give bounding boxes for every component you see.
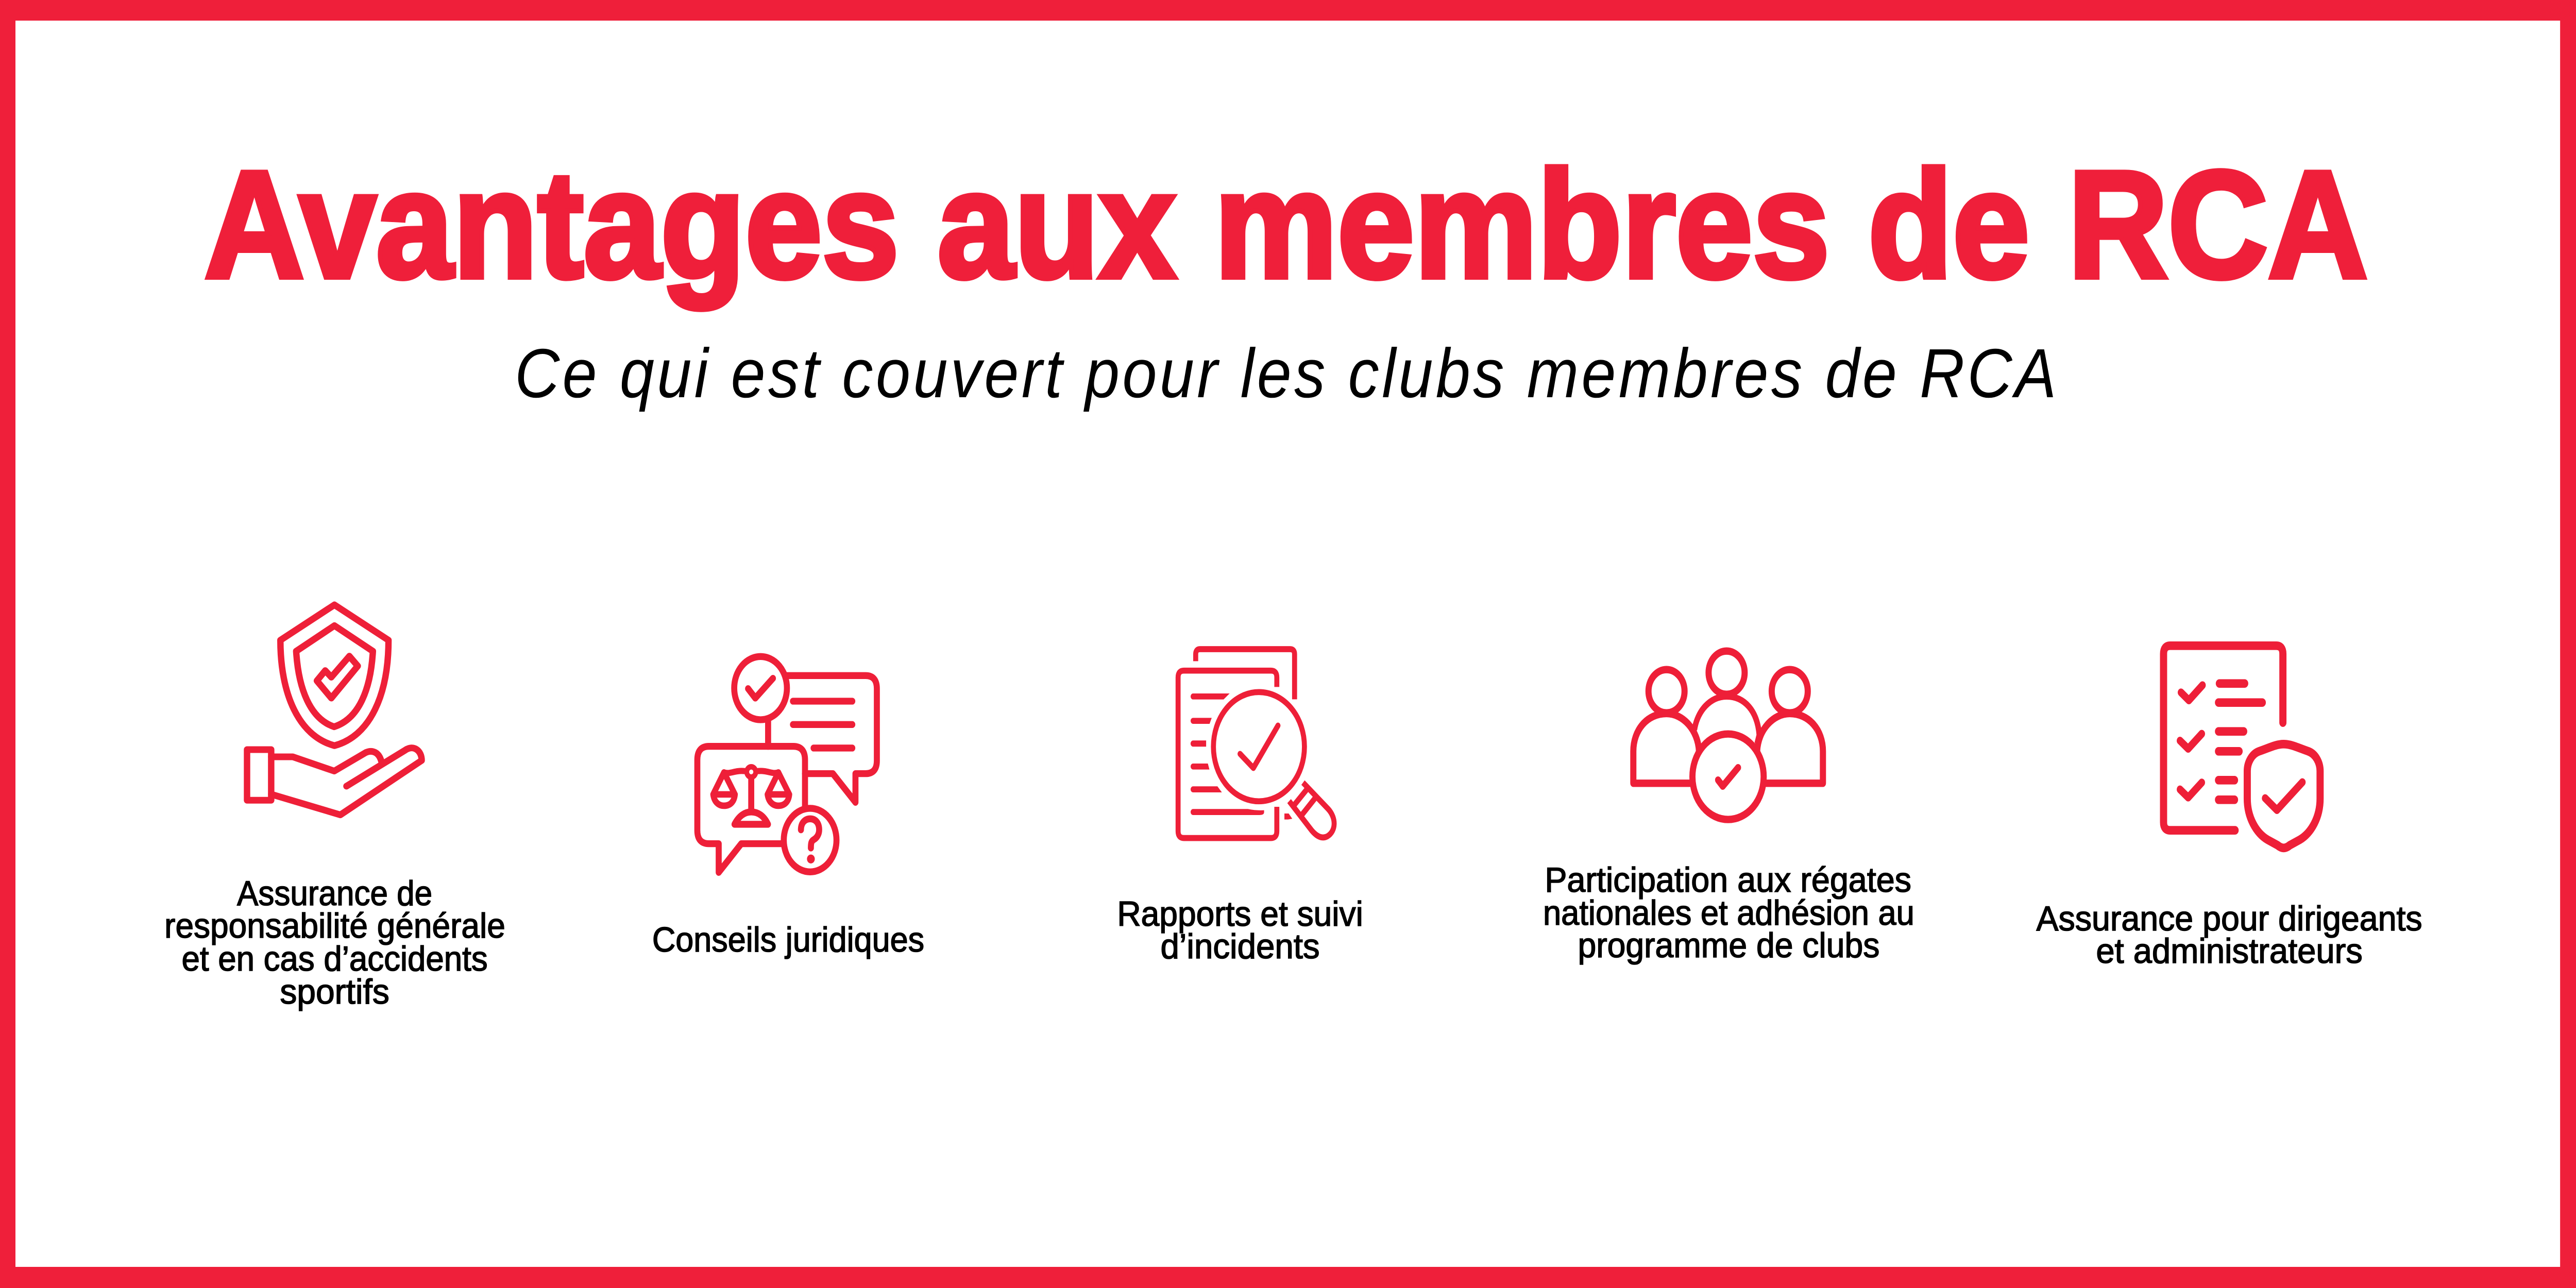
label: rapports et suivi: Rapports et suivi <box>1117 894 1363 934</box>
label: assurance responsabilité <box>164 874 505 1011</box>
icon: legal advice speech bubbles <box>697 656 877 872</box>
icon: report with magnifier <box>1178 649 1334 838</box>
label: participation aux régates: nationales et adhésion au <box>1543 893 1914 933</box>
icon: group of people with check <box>1633 651 1823 820</box>
label: rapports et suivi <box>1117 894 1363 966</box>
label: participation aux régates: Participation aux régates <box>1545 860 1911 900</box>
label: assurance dirigeants <box>2036 899 2422 971</box>
label: participation aux régates: programme de clubs <box>1578 926 1879 965</box>
label: participation aux régates <box>1543 860 1914 965</box>
subtitle: Ce qui est couvert pour les clubs membres de RCA <box>515 335 2059 412</box>
label: assurance dirigeants: Assurance pour dirigeants <box>2036 899 2422 938</box>
icon: checklist with shield <box>2163 646 2320 848</box>
label: rapports et suivi: d’incidents <box>1160 927 1320 966</box>
title: Avantages aux membres de RCA <box>205 139 2368 311</box>
label: assurance dirigeants: et administrateurs <box>2096 931 2363 971</box>
label: assurance responsabilité: Assurance de <box>237 874 432 913</box>
label: assurance responsabilité: sportifs <box>280 972 389 1011</box>
icon: shield over open hand <box>247 605 422 815</box>
label: assurance responsabilité: et en cas d’accidents <box>181 939 488 978</box>
label: assurance responsabilité: responsabilité générale <box>164 906 505 945</box>
label: conseils juridiques: Conseils juridiques <box>652 920 924 959</box>
